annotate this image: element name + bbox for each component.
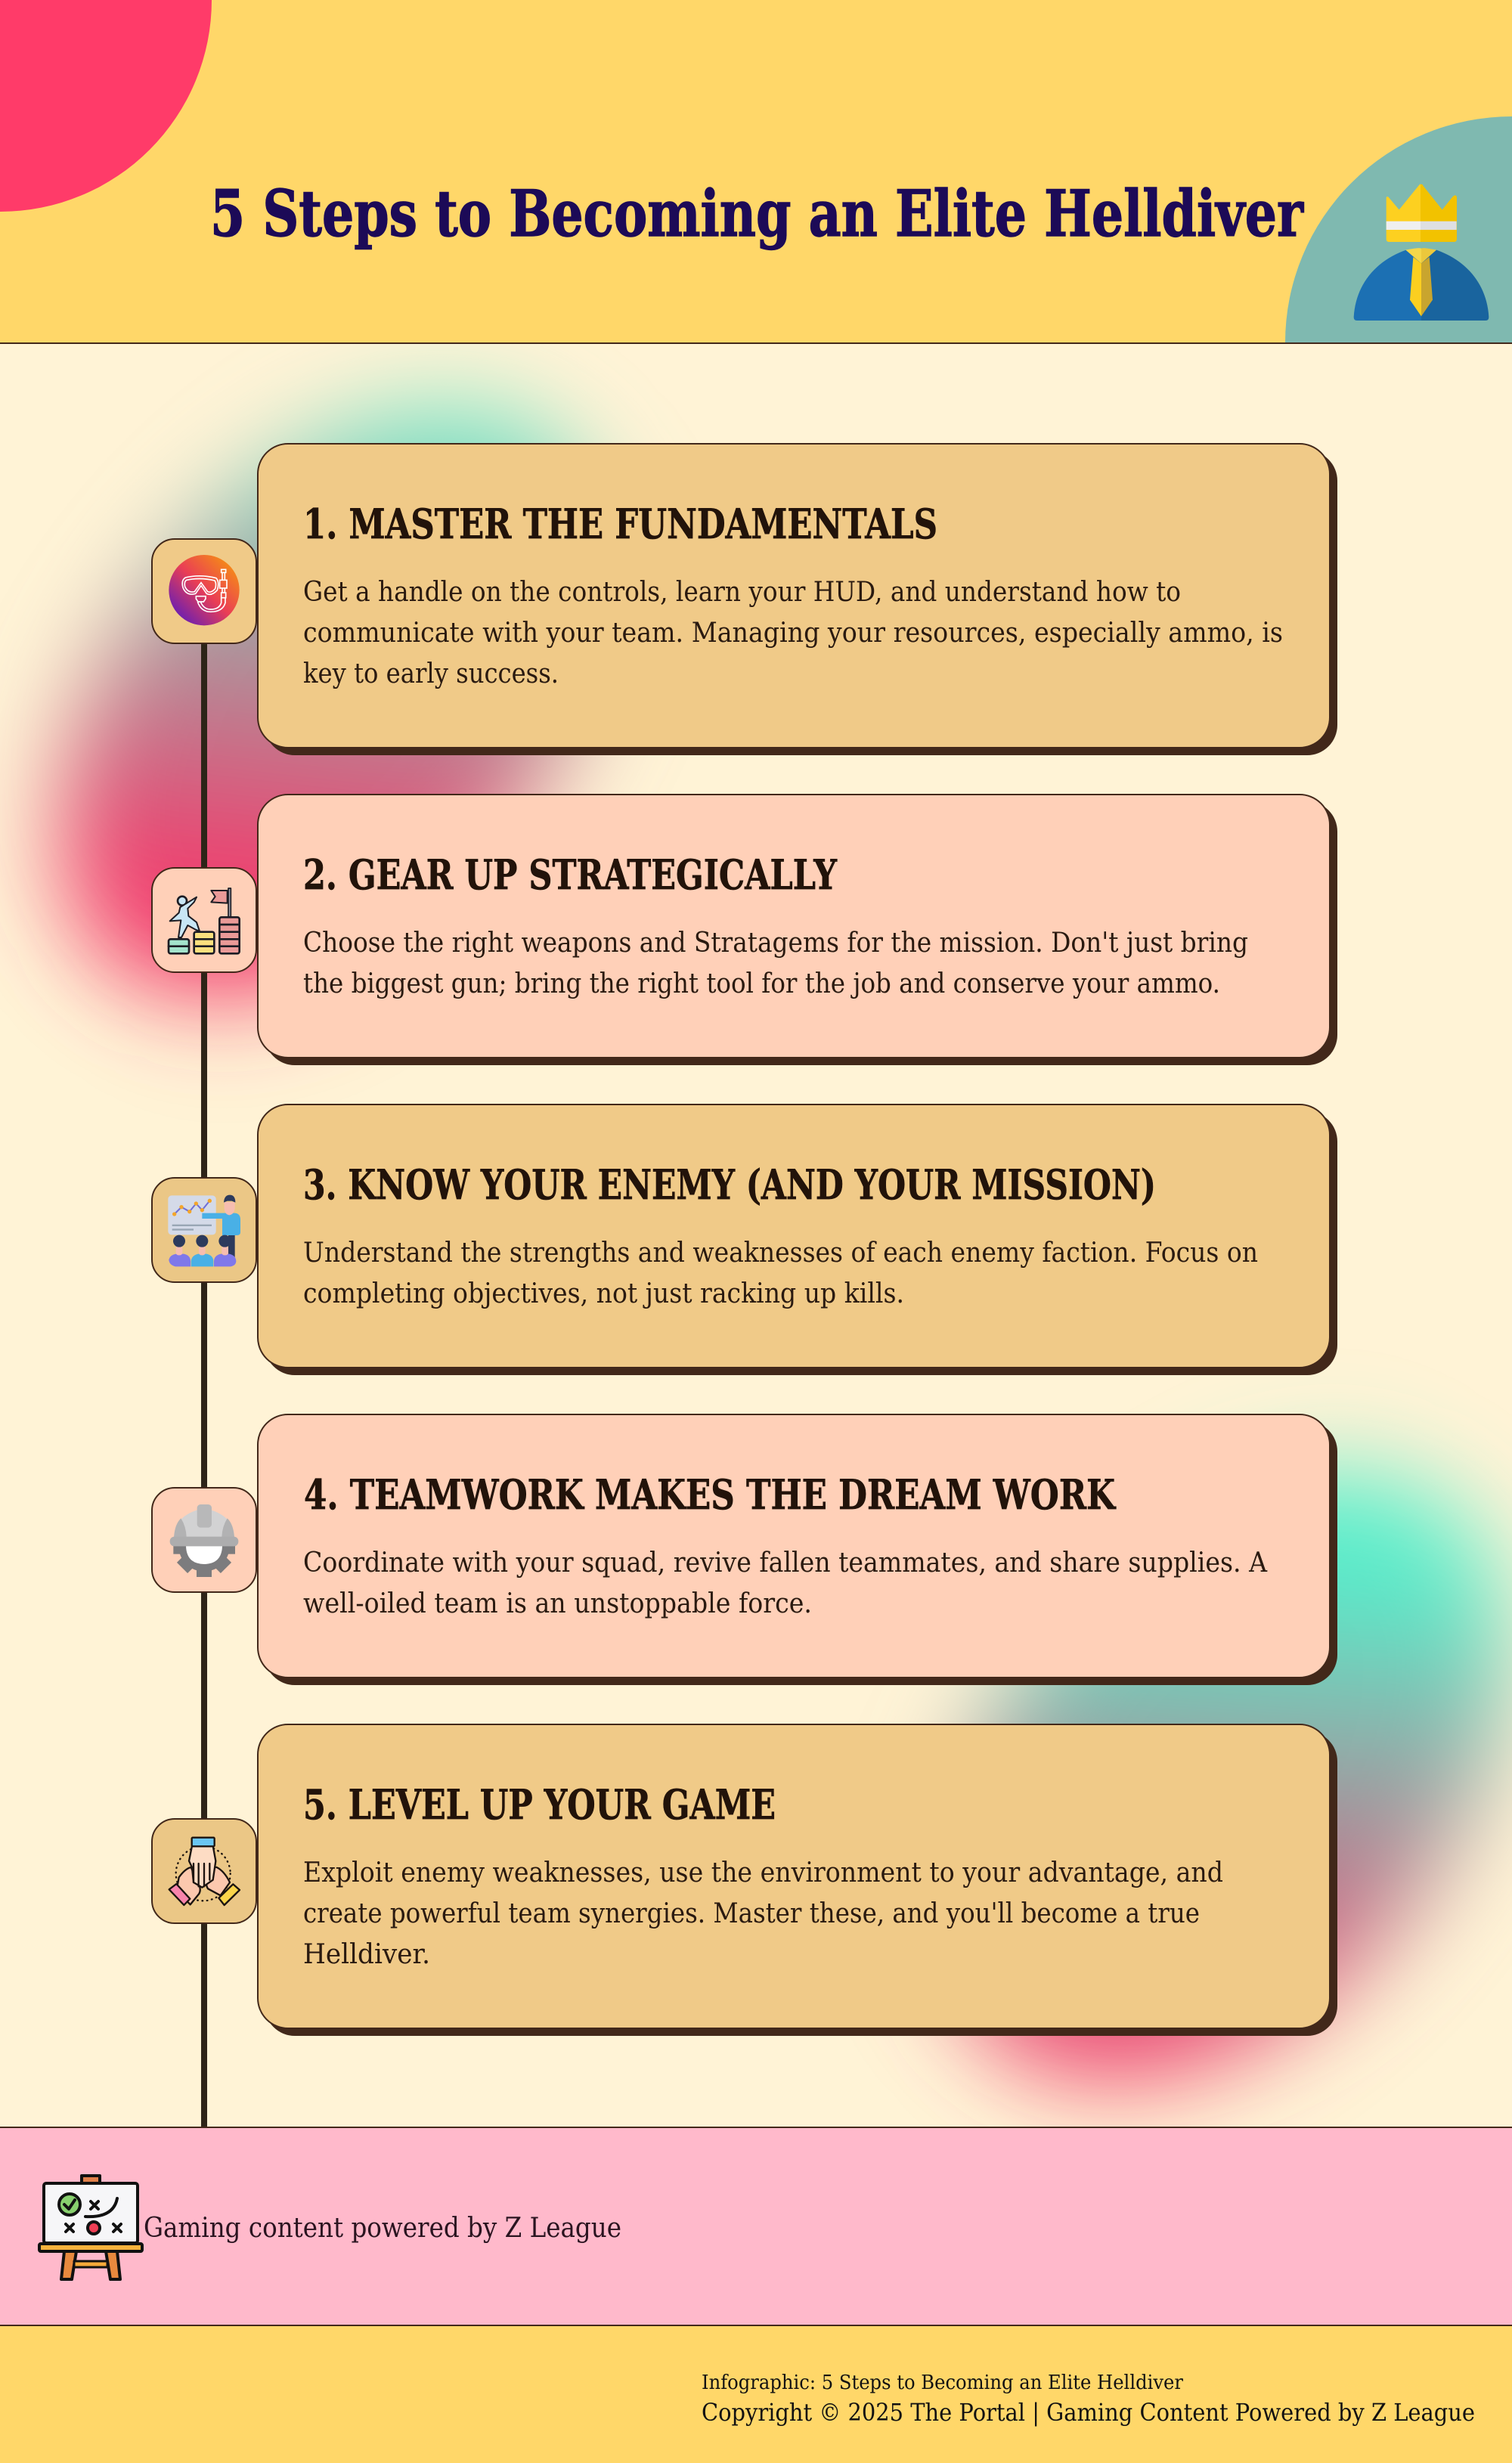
icon: crowned person [1354, 184, 1489, 321]
header rule [0, 342, 1512, 344]
footer band [0, 2326, 1512, 2463]
decorative teal quarter circle [1285, 116, 1512, 342]
step 3 body: completing objectives, not just racking up kills. [303, 1278, 904, 1309]
step 2 body: Choose the right weapons and Stratagems for the mission. Don't just bring [303, 928, 1248, 959]
step 4 body: Coordinate with your squad, revive fallen teammates, and share supplies. A [303, 1548, 1268, 1578]
step 4 body: well-oiled team is an unstoppable force. [303, 1588, 812, 1619]
step 4 body [303, 1548, 1268, 1619]
step 2 card [258, 795, 1337, 1065]
icon tile 2: climbing steps to flag [152, 868, 256, 972]
step 5 body: Helldiver. [303, 1939, 430, 1970]
header band [0, 0, 1512, 344]
step 1 card [258, 444, 1337, 755]
step 1 heading: 1. MASTER THE FUNDAMENTALS [303, 500, 937, 548]
step 5 body [303, 1857, 1223, 1970]
step 2 body [303, 928, 1248, 999]
icon tile 3: presenter and audience [152, 1178, 256, 1282]
decorative blob: teal to pink, bottom right [828, 1365, 1512, 2189]
step 1 body: Get a handle on the controls, learn your HUD, and understand how to [303, 577, 1181, 608]
sponsor text: Gaming content powered by Z League [144, 2213, 621, 2244]
step 5 heading: 5. LEVEL UP YOUR GAME [303, 1780, 776, 1829]
timeline line [201, 590, 207, 2127]
step 3 body [303, 1238, 1258, 1309]
step 4 heading: 4. TEAMWORK MAKES THE DREAM WORK [304, 1470, 1117, 1519]
step 2 heading: 2. GEAR UP STRATEGICALLY [303, 850, 838, 899]
step 1 body: communicate with your team. Managing your resources, especially ammo, is [303, 618, 1283, 649]
step 3 body: Understand the strengths and weaknesses of each enemy faction. Focus on [303, 1238, 1258, 1269]
step 4 card [258, 1414, 1337, 1685]
icon: tactics board on easel [39, 2176, 142, 2279]
step 3 heading: 3. KNOW YOUR ENEMY (AND YOUR MISSION) [303, 1160, 1156, 1209]
step 3 card [258, 1104, 1337, 1375]
step 5 body: Exploit enemy weaknesses, use the environment to your advantage, and [303, 1857, 1223, 1888]
step 1 body: key to early success. [303, 658, 559, 689]
step 5 body: create powerful team synergies. Master these, and you'll become a true [303, 1898, 1200, 1929]
step 5 card [258, 1724, 1337, 2036]
icon tile 1: snorkel mask [152, 539, 256, 643]
decorative pink quarter circle [0, 0, 212, 212]
icon tile 4: helmet and gear [152, 1488, 256, 1592]
icon tile 5: three joined hands [152, 1819, 256, 1923]
step 1 body [303, 577, 1283, 689]
step 2 body: the biggest gun; bring the right tool for the job and conserve your ammo. [303, 968, 1220, 999]
footer infographic title: Infographic: 5 Steps to Becoming an Elite Helldiver [702, 2372, 1184, 2394]
sponsor band [0, 2127, 1512, 2326]
decorative blob: teal to pink, top left [0, 304, 717, 1102]
